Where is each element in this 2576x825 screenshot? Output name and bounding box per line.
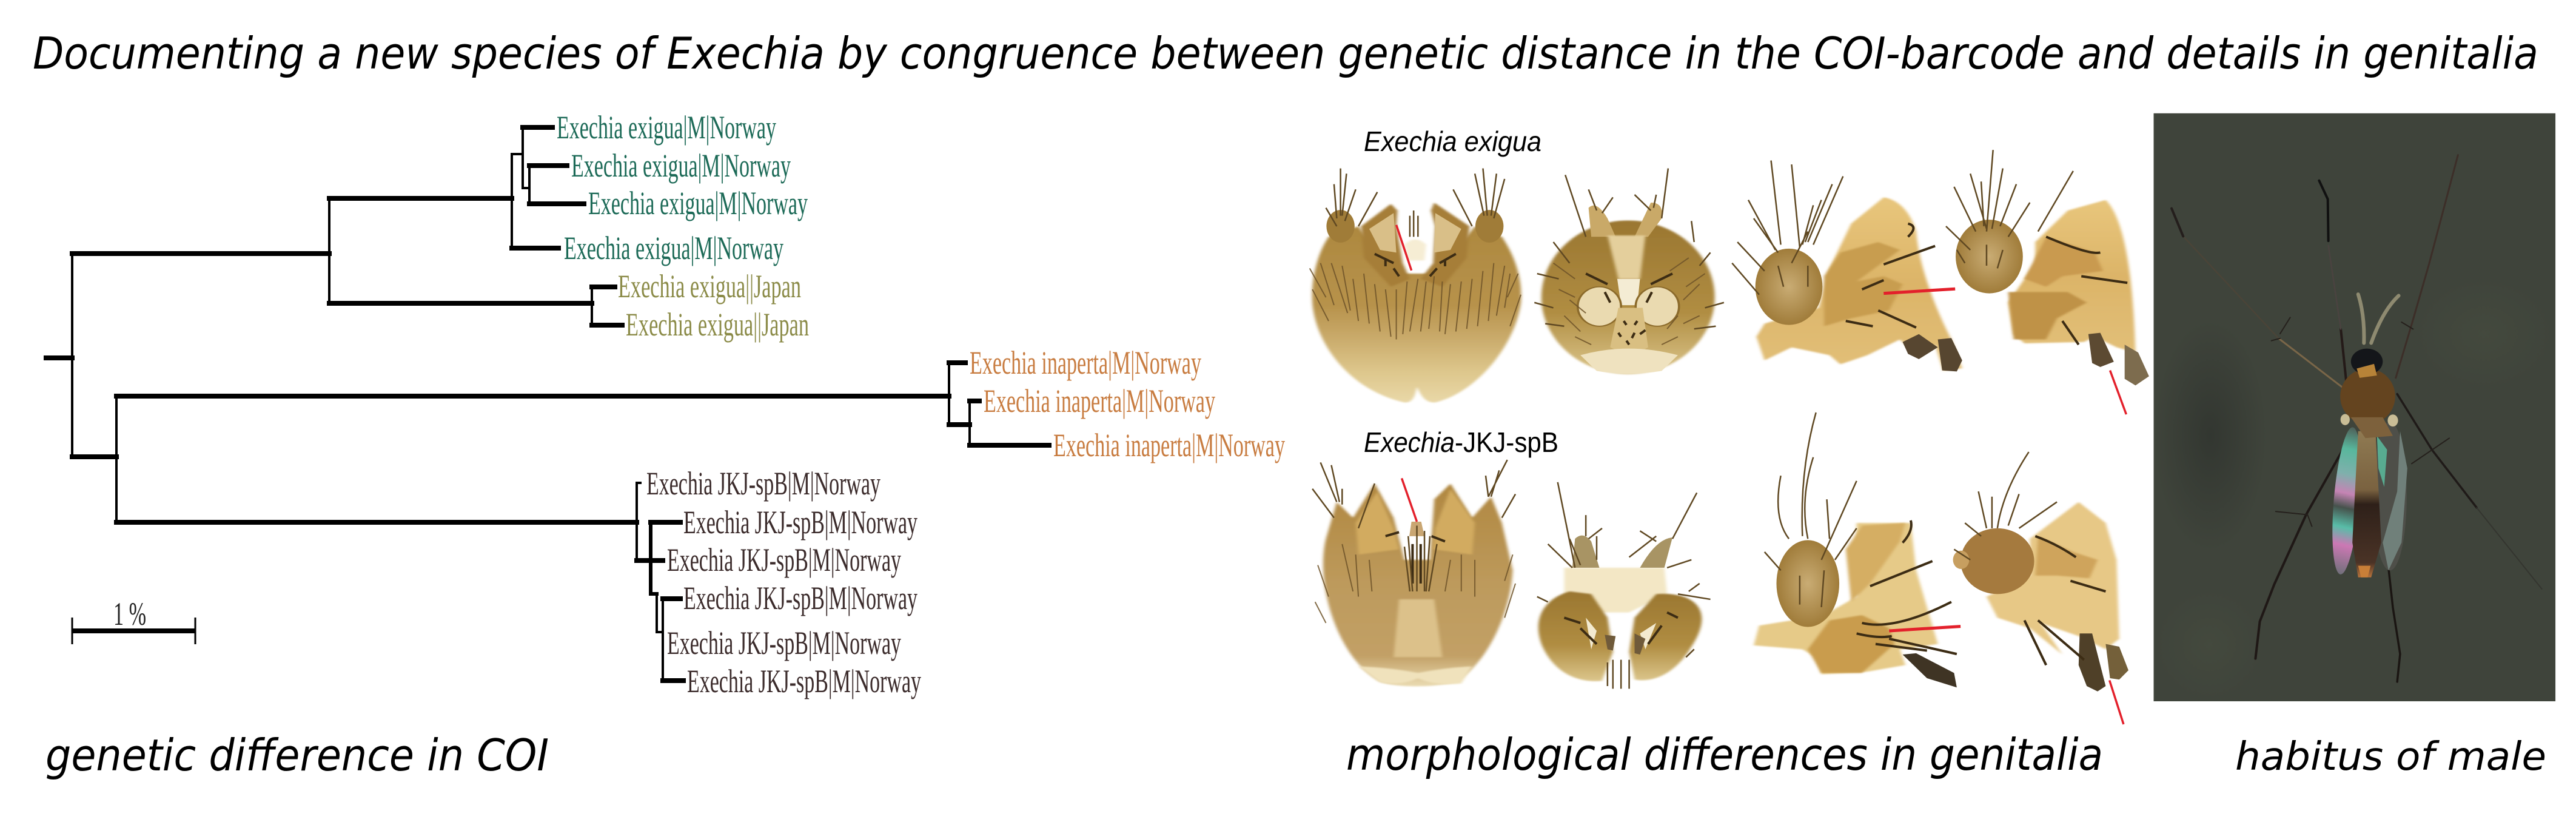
scale bar: 1 % [113,596,146,632]
tip label: Exechia exigua Japan 2: Exechia exigua||Japan [626,306,809,343]
specimen: spB lateral view right [1953,452,2128,692]
specimen: exigua dorsal view [1534,169,1724,374]
tip label: Exechia JKJ-spB 3: Exechia JKJ-spB|M|Norway [667,542,901,578]
panel: habitus photo [2154,113,2555,701]
tip label: Exechia exigua 4: Exechia exigua|M|Norway [564,230,783,266]
insect body [2327,349,2407,578]
specimen: exigua lateral view left [1732,161,1962,371]
label: Exechia-JKJ-spB: Exechia-JKJ-spB [1364,426,1558,458]
tip label: Exechia inaperta 2: Exechia inaperta|M|Norway [984,383,1215,419]
scale bar [72,596,195,644]
red pointer lines [1397,225,2126,414]
tip label: Exechia inaperta 3: Exechia inaperta|M|Norway [1053,427,1285,463]
tip label: Exechia inaperta 1: Exechia inaperta|M|Norway [970,345,1201,381]
tip label: Exechia JKJ-spB 1: Exechia JKJ-spB|M|Norway [646,465,880,502]
tip label: Exechia JKJ-spB 5: Exechia JKJ-spB|M|Norway [667,625,901,661]
specimen: spB lateral view left [1754,412,1957,687]
heading: genetic difference in COI: genetic difference in COI [45,730,549,781]
heading: habitus of male: habitus of male [2235,735,2546,780]
red pointer lines [1402,478,2124,724]
tip label: Exechia JKJ-spB 4: Exechia JKJ-spB|M|Norway [683,580,917,616]
specimen: exigua lateral view right [1946,150,2149,385]
tip label: Exechia exigua Japan 1: Exechia exigua||Japan [618,268,801,305]
tip label: Exechia JKJ-spB 2: Exechia JKJ-spB|M|Norway [683,504,917,540]
insect legs and antennae [2172,155,2542,682]
tip label: Exechia exigua 1: Exechia exigua|M|Norway [557,109,776,146]
specimen: exigua ventral view [1310,169,1521,403]
panel: Exechia exigua genitalia [1310,150,2149,414]
specimen: spB ventral view [1312,460,1515,686]
specimen: spB dorsal view [1537,482,1711,689]
tip label: Exechia exigua 2: Exechia exigua|M|Norway [571,147,791,184]
heading: morphological differences in genitalia: morphological differences in genitalia [1346,729,2103,780]
tip label: Exechia exigua 3: Exechia exigua|M|Norway [588,185,808,221]
tree branches [46,127,1049,681]
label: Exechia exigua: Exechia exigua [1364,126,1541,157]
tip label: Exechia JKJ-spB 6: Exechia JKJ-spB|M|Norway [687,663,921,699]
photo background [2154,113,2555,701]
panel: Exechia JKJ-spB genitalia [1312,412,2128,724]
panel: phylogenetic tree [46,109,1285,699]
